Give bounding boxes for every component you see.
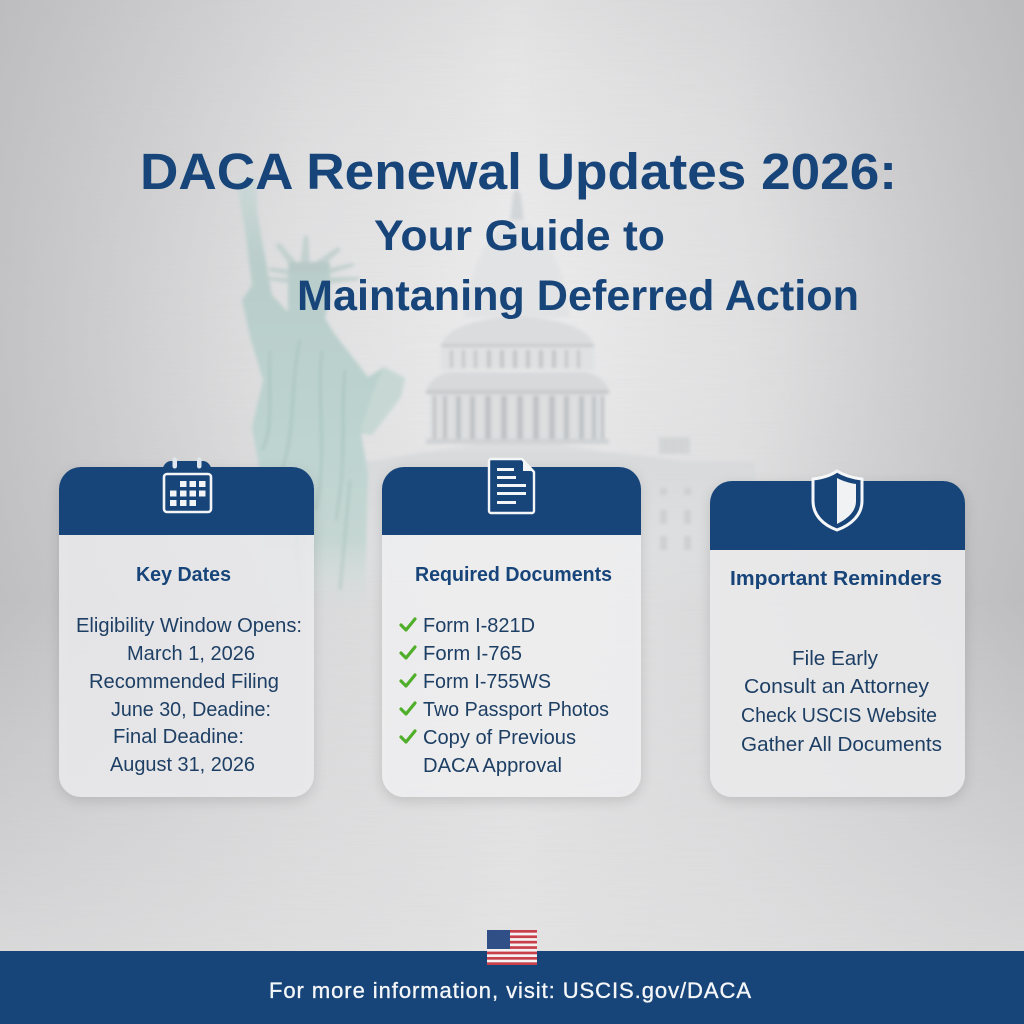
icon: shield bbox=[813, 471, 862, 530]
documents list: Form I-765 bbox=[423, 643, 522, 665]
card header band bbox=[710, 481, 965, 550]
dates list bbox=[76, 615, 302, 776]
heading: important reminders: Important Reminders bbox=[730, 568, 942, 590]
card body bbox=[710, 481, 965, 797]
title line 3: Maintaning Deferred Action bbox=[297, 272, 859, 320]
illustration: US Capitol building bbox=[365, 188, 755, 602]
dates list: Eligibility Window Opens: bbox=[76, 615, 302, 637]
panel: key dates bbox=[59, 458, 314, 797]
documents list: Copy of Previous bbox=[423, 727, 576, 749]
documents list: DACA Approval bbox=[423, 755, 562, 777]
card header band bbox=[59, 467, 314, 535]
footer band bbox=[0, 951, 1024, 1024]
documents list: Form I-821D bbox=[423, 615, 535, 637]
panel: important reminders bbox=[710, 471, 965, 797]
documents list bbox=[423, 615, 609, 777]
icon: document bbox=[489, 459, 534, 513]
dates list: March 1, 2026 bbox=[127, 643, 255, 665]
heading: key dates: Key Dates bbox=[136, 564, 231, 586]
documents list: Two Passport Photos bbox=[423, 699, 609, 721]
title bbox=[140, 143, 897, 320]
dates list: Recommended Filing bbox=[89, 671, 279, 693]
title line 2: Your Guide to bbox=[374, 212, 665, 260]
card body bbox=[59, 467, 314, 797]
card header band bbox=[382, 467, 641, 535]
reminders list bbox=[741, 648, 942, 756]
documents list: Form I-755WS bbox=[423, 671, 551, 693]
dates list: Final Deadine: bbox=[113, 726, 244, 748]
heading: required documents: Required Documents bbox=[415, 564, 612, 586]
reminders list: Check USCIS Website bbox=[741, 705, 937, 727]
reminders list: Consult an Attorney bbox=[744, 676, 929, 698]
icon: check marks bbox=[401, 619, 415, 742]
reminders list: File Early bbox=[792, 648, 878, 670]
dates list: August 31, 2026 bbox=[110, 754, 255, 776]
dates list: June 30, Deadine: bbox=[111, 699, 271, 721]
panel: required documents bbox=[382, 459, 641, 797]
illustration: Statue of Liberty bbox=[236, 178, 405, 605]
icon: calendar bbox=[162, 458, 212, 512]
title line 1: DACA Renewal Updates 2026: bbox=[140, 143, 897, 200]
card body bbox=[382, 467, 641, 797]
icon: US flag bbox=[487, 930, 537, 965]
reminders list: Gather All Documents bbox=[741, 734, 942, 756]
footer link text: For more information, visit: USCIS.gov/DACA bbox=[269, 978, 751, 1003]
